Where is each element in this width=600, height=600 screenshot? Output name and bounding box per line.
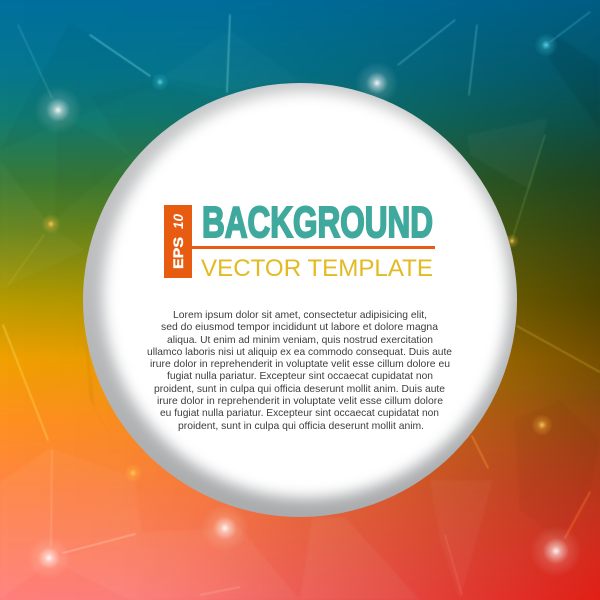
body text block: ullamco laboris nisi ut aliquip ex ea commodo consequat. Duis aute (147, 347, 452, 358)
orange EPS badge: EPS (170, 237, 186, 269)
orange EPS badge (164, 205, 192, 278)
body text block: eu fugiat nulla pariatur. Excepteur sint occaecat cupidatat non (160, 408, 439, 419)
body text block: irure dolor in reprehenderit in voluptate velit esse cillum dolore eu (150, 359, 450, 370)
orange EPS badge: 10 (170, 214, 186, 229)
body text block: sed do eiusmod tempor incididunt ut labore et dolore magna (161, 322, 438, 333)
title: BACKGROUND: BACKGROUND (202, 198, 433, 247)
body text block: proident, sunt in culpa qui officia deserunt mollit anim. (178, 421, 424, 432)
white circle panel (83, 83, 517, 517)
body text block: proident, sunt in culpa qui officia deserunt mollit anim. Duis aute (154, 384, 445, 395)
body text block: Lorem ipsum dolor sit amet, consectetur adipisicing elit, (173, 310, 427, 321)
orange divider line (192, 246, 435, 249)
body text block (147, 310, 452, 432)
body text block: aliqua. Ut enim ad minim veniam, quis nostrud exercitation (167, 335, 433, 346)
body text block: fugiat nulla pariatur. Excepteur sint occaecat cupidatat non (167, 371, 433, 382)
body text block: irure dolor in reprehenderit in voluptate velit esse cillum dolore (157, 396, 443, 407)
subtitle: VECTOR TEMPLATE: VECTOR TEMPLATE (201, 255, 433, 282)
